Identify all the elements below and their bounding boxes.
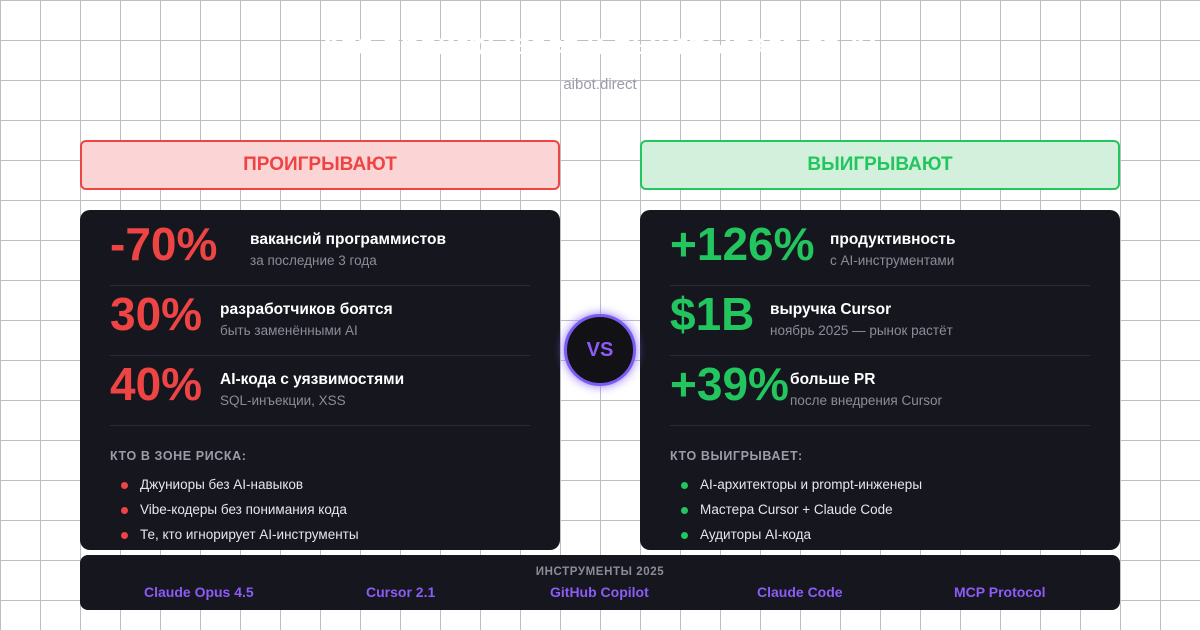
stat 30%: быть заменёнными AI xyxy=(220,323,358,338)
vs badge: VS xyxy=(587,338,613,360)
risk list: Джуниоры без AI-навыков xyxy=(140,477,303,492)
header: losers xyxy=(80,140,560,190)
header: winners: ВЫИГРЫВАЮТ xyxy=(807,154,953,175)
tools list: GitHub Copilot xyxy=(550,584,649,600)
vs badge xyxy=(564,314,636,386)
stat +39%: больше PR xyxy=(790,371,875,388)
header: winners xyxy=(640,140,1120,190)
stat 40%: SQL-инъекции, XSS xyxy=(220,393,346,408)
winners label: КТО ВЫИГРЫВАЕТ: xyxy=(670,449,803,463)
stat 30%: разработчиков боятся xyxy=(220,301,393,318)
stat 40% xyxy=(110,358,404,410)
stat +126%: с AI-инструментами xyxy=(830,253,954,268)
tools list: Cursor 2.1 xyxy=(366,584,435,600)
risk label: КТО В ЗОНЕ РИСКА: xyxy=(110,449,247,463)
stat $1B: ноябрь 2025 — рынок растёт xyxy=(770,323,953,338)
tools list: Claude Code xyxy=(757,584,843,600)
tools list: MCP Protocol xyxy=(954,584,1046,600)
tools list: Claude Opus 4.5 xyxy=(144,584,254,600)
stat +39% xyxy=(670,358,942,410)
risk list: Те, кто игнорирует AI-инструменты xyxy=(140,527,359,542)
winners list: AI-архитекторы и prompt-инженеры xyxy=(700,477,922,492)
stat $1B: $1B xyxy=(670,288,754,340)
tools bar xyxy=(80,555,1120,610)
stat -70%: вакансий программистов xyxy=(250,231,446,248)
stat +126%: +126% xyxy=(670,218,815,270)
stat -70%: -70% xyxy=(110,218,217,270)
stat 30% xyxy=(110,288,393,340)
title: Кто проигрывает и выигрывает от AI xyxy=(323,28,877,61)
stat -70% xyxy=(110,218,446,270)
tools label: ИНСТРУМЕНТЫ 2025 xyxy=(536,566,664,578)
stat $1B xyxy=(670,288,953,340)
stat +126%: продуктивность xyxy=(830,231,956,248)
subtitle: aibot.direct xyxy=(563,76,637,93)
stat $1B: выручка Cursor xyxy=(770,301,891,318)
stat +126% xyxy=(670,218,956,270)
panel: losers xyxy=(80,210,560,550)
winners list: Мастера Cursor + Claude Code xyxy=(700,502,893,517)
stat 40%: AI-кода с уязвимостями xyxy=(220,371,404,388)
header: losers: ПРОИГРЫВАЮТ xyxy=(243,154,397,175)
winners list: Аудиторы AI-кода xyxy=(700,527,811,542)
stat 30%: 30% xyxy=(110,288,202,340)
stat +39%: +39% xyxy=(670,358,789,410)
panel: winners xyxy=(640,210,1120,550)
winners list xyxy=(681,477,922,542)
stat +39%: после внедрения Cursor xyxy=(790,393,942,408)
risk list xyxy=(121,477,359,542)
tools list xyxy=(144,584,1046,600)
stat 40%: 40% xyxy=(110,358,202,410)
stat -70%: за последние 3 года xyxy=(250,253,377,268)
risk list: Vibe-кодеры без понимания кода xyxy=(140,502,347,517)
